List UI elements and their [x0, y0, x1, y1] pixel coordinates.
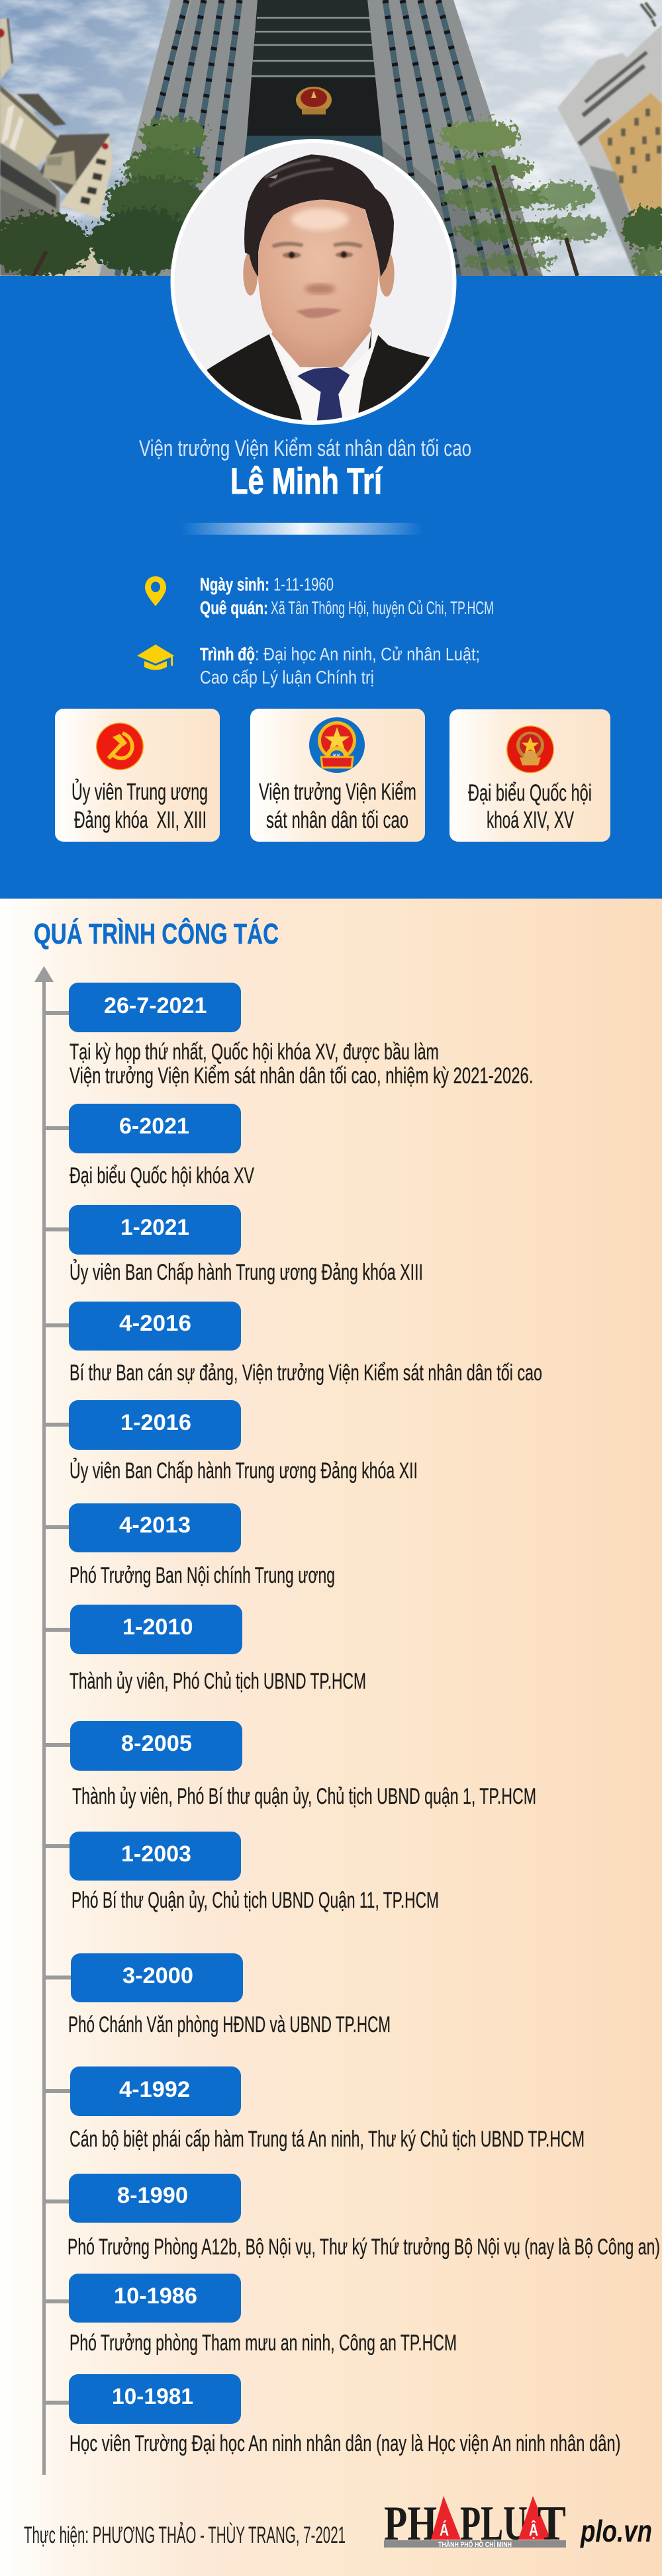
education text: : Đại học An ninh, Cử nhân Luật; [255, 644, 480, 664]
entry: 1-2010 [44, 1605, 366, 1694]
right building [557, 3, 662, 276]
entry: 4-2013 [44, 1503, 335, 1588]
shirt and neck [271, 326, 379, 420]
entry: 3-2000: Phó Chánh Văn phòng HĐND và UBND TP.HCM [68, 2012, 391, 2037]
entry: 26-7-2021 [44, 983, 534, 1088]
left buildings [0, 19, 113, 276]
birth and hometown text: Ngày sinh: [200, 574, 269, 594]
logo: Pháp Luật: T [538, 2497, 566, 2551]
entry: 4-2016: 4-2016 [119, 1311, 191, 1336]
education text: Trình độ [200, 644, 255, 664]
education text: Cao cấp Lý luận Chính trị [200, 667, 374, 688]
panel: career timeline [0, 899, 662, 2576]
entry: 1-2010: Thành ủy viên, Phó Chủ tịch UBND TP.HCM [70, 1669, 366, 1694]
icon: national emblem [506, 725, 554, 773]
entry: 1-2016 [44, 1400, 418, 1484]
entry: 4-2013: Phó Trưởng Ban Nội chính Trung ương [70, 1563, 335, 1588]
subtitle: Viện trưởng Viện Kiểm sát nhân dân tối cao [139, 436, 471, 461]
jacket [207, 328, 430, 420]
panel: blue profile [0, 139, 662, 899]
icon: hammer and sickle [96, 723, 144, 770]
birth and hometown text: 1-11-1960 [273, 574, 334, 594]
trees [0, 117, 662, 277]
card: national assembly deputy [449, 709, 610, 842]
tie [297, 367, 350, 422]
entry: 6-2021: 6-2021 [119, 1114, 189, 1139]
central tower [99, 0, 543, 276]
entry: 1-2003 [44, 1832, 439, 1913]
timeline arrow [34, 966, 54, 2475]
name: Lê Minh Trí [230, 460, 383, 502]
entry: 10-1981: 10-1981 [112, 2384, 193, 2409]
entry: 8-1990 [44, 2174, 660, 2260]
entry: 10-1986: 10-1986 [114, 2284, 197, 2309]
entry: 8-1990: 8-1990 [117, 2183, 188, 2208]
card: national assembly deputy: khoá XIV, XV [487, 807, 574, 833]
card: national assembly deputy: Đại biểu Quốc hội [468, 780, 592, 806]
gradient bar [181, 523, 422, 535]
logo: Pháp Luật [384, 2496, 566, 2551]
entry: 10-1986: Phó Trưởng phòng Tham mưu an ninh, Công an TP.HCM [70, 2331, 457, 2356]
education text [200, 644, 480, 688]
portrait [171, 139, 457, 431]
entry: 1-2021: 1-2021 [120, 1215, 189, 1240]
logo: Pháp Luật: PLU [460, 2497, 528, 2551]
entry: 6-2021: Đại biểu Quốc hội khóa XV [70, 1163, 254, 1188]
card: prosecutor general: Viện trưởng Viện Kiểm [259, 779, 416, 805]
entry: 1-2003: 1-2003 [121, 1842, 191, 1867]
logo: Pháp Luật: Ậ [529, 2520, 538, 2540]
entry: 10-1986 [44, 2274, 457, 2356]
card: party central committee: Đảng khóa XII, XIII [74, 807, 207, 833]
birth and hometown text: Quê quán: [200, 598, 268, 618]
brows eyes nose mouth [271, 208, 363, 318]
entry: 1-2016: Ủy viên Ban Chấp hành Trung ương Đảng khóa XII [70, 1458, 418, 1484]
logo: Pháp Luật: PH [384, 2497, 437, 2551]
card: party central committee: Ủy viên Trung ương [71, 778, 208, 805]
card: prosecutor general [250, 709, 425, 842]
logo: Pháp Luật: Á [440, 2520, 449, 2540]
birth and hometown text: Xã Tân Thông Hội, huyện Củ Chi, TP.HCM [271, 598, 494, 618]
icon: location pin [145, 576, 166, 606]
entry: 4-1992: 4-1992 [119, 2077, 190, 2102]
entry: 1-2016: 1-2016 [120, 1410, 191, 1435]
footer credit: Thực hiện: PHƯƠNG THẢO - THÙY TRANG, 7-2021 [24, 2522, 346, 2548]
logo: Pháp Luật: THÀNH PHỐ HỒ CHÍ MINH [438, 2540, 512, 2549]
entry: 1-2003: Phó Bí thư Quận ủy, Chủ tịch UBND Quận 11, TP.HCM [71, 1888, 439, 1913]
entry: 6-2021 [44, 1104, 254, 1188]
entry: 8-2005 [44, 1721, 536, 1809]
icon: procuracy emblem [309, 717, 365, 773]
header photo: prosecution building [0, 0, 662, 277]
card: party central committee [55, 709, 220, 842]
entry: 4-2016 [44, 1302, 542, 1386]
face [258, 200, 379, 349]
entry: 4-1992 [44, 2066, 585, 2152]
entry: 3-2000: 3-2000 [122, 1963, 193, 1988]
entry: 1-2021: Ủy viên Ban Chấp hành Trung ương Đảng khóa XIII [70, 1260, 423, 1285]
entry: 1-2010: 1-2010 [122, 1615, 193, 1640]
ears [243, 250, 395, 296]
card: prosecutor general: sát nhân dân tối cao [266, 807, 408, 833]
heading: QUÁ TRÌNH CÔNG TÁC [34, 916, 279, 950]
icon: procuracy emblem: KS [333, 753, 341, 759]
entry: 26-7-2021: 26-7-2021 [104, 993, 207, 1018]
entry: 4-2013: 4-2013 [119, 1513, 191, 1538]
birth and hometown text [200, 574, 494, 618]
entry: 1-2021 [44, 1205, 423, 1285]
icon: graduation cap [137, 644, 174, 670]
hair [244, 154, 394, 277]
entry: 10-1981 [44, 2374, 621, 2456]
entry: 26-7-2021: Tại kỳ họp thứ nhất, Quốc hội khóa XV, được bầu làm [70, 1040, 439, 1065]
entry: 3-2000 [44, 1953, 391, 2037]
national emblem on tower [296, 87, 332, 114]
entry: 8-2005: 8-2005 [121, 1731, 192, 1756]
